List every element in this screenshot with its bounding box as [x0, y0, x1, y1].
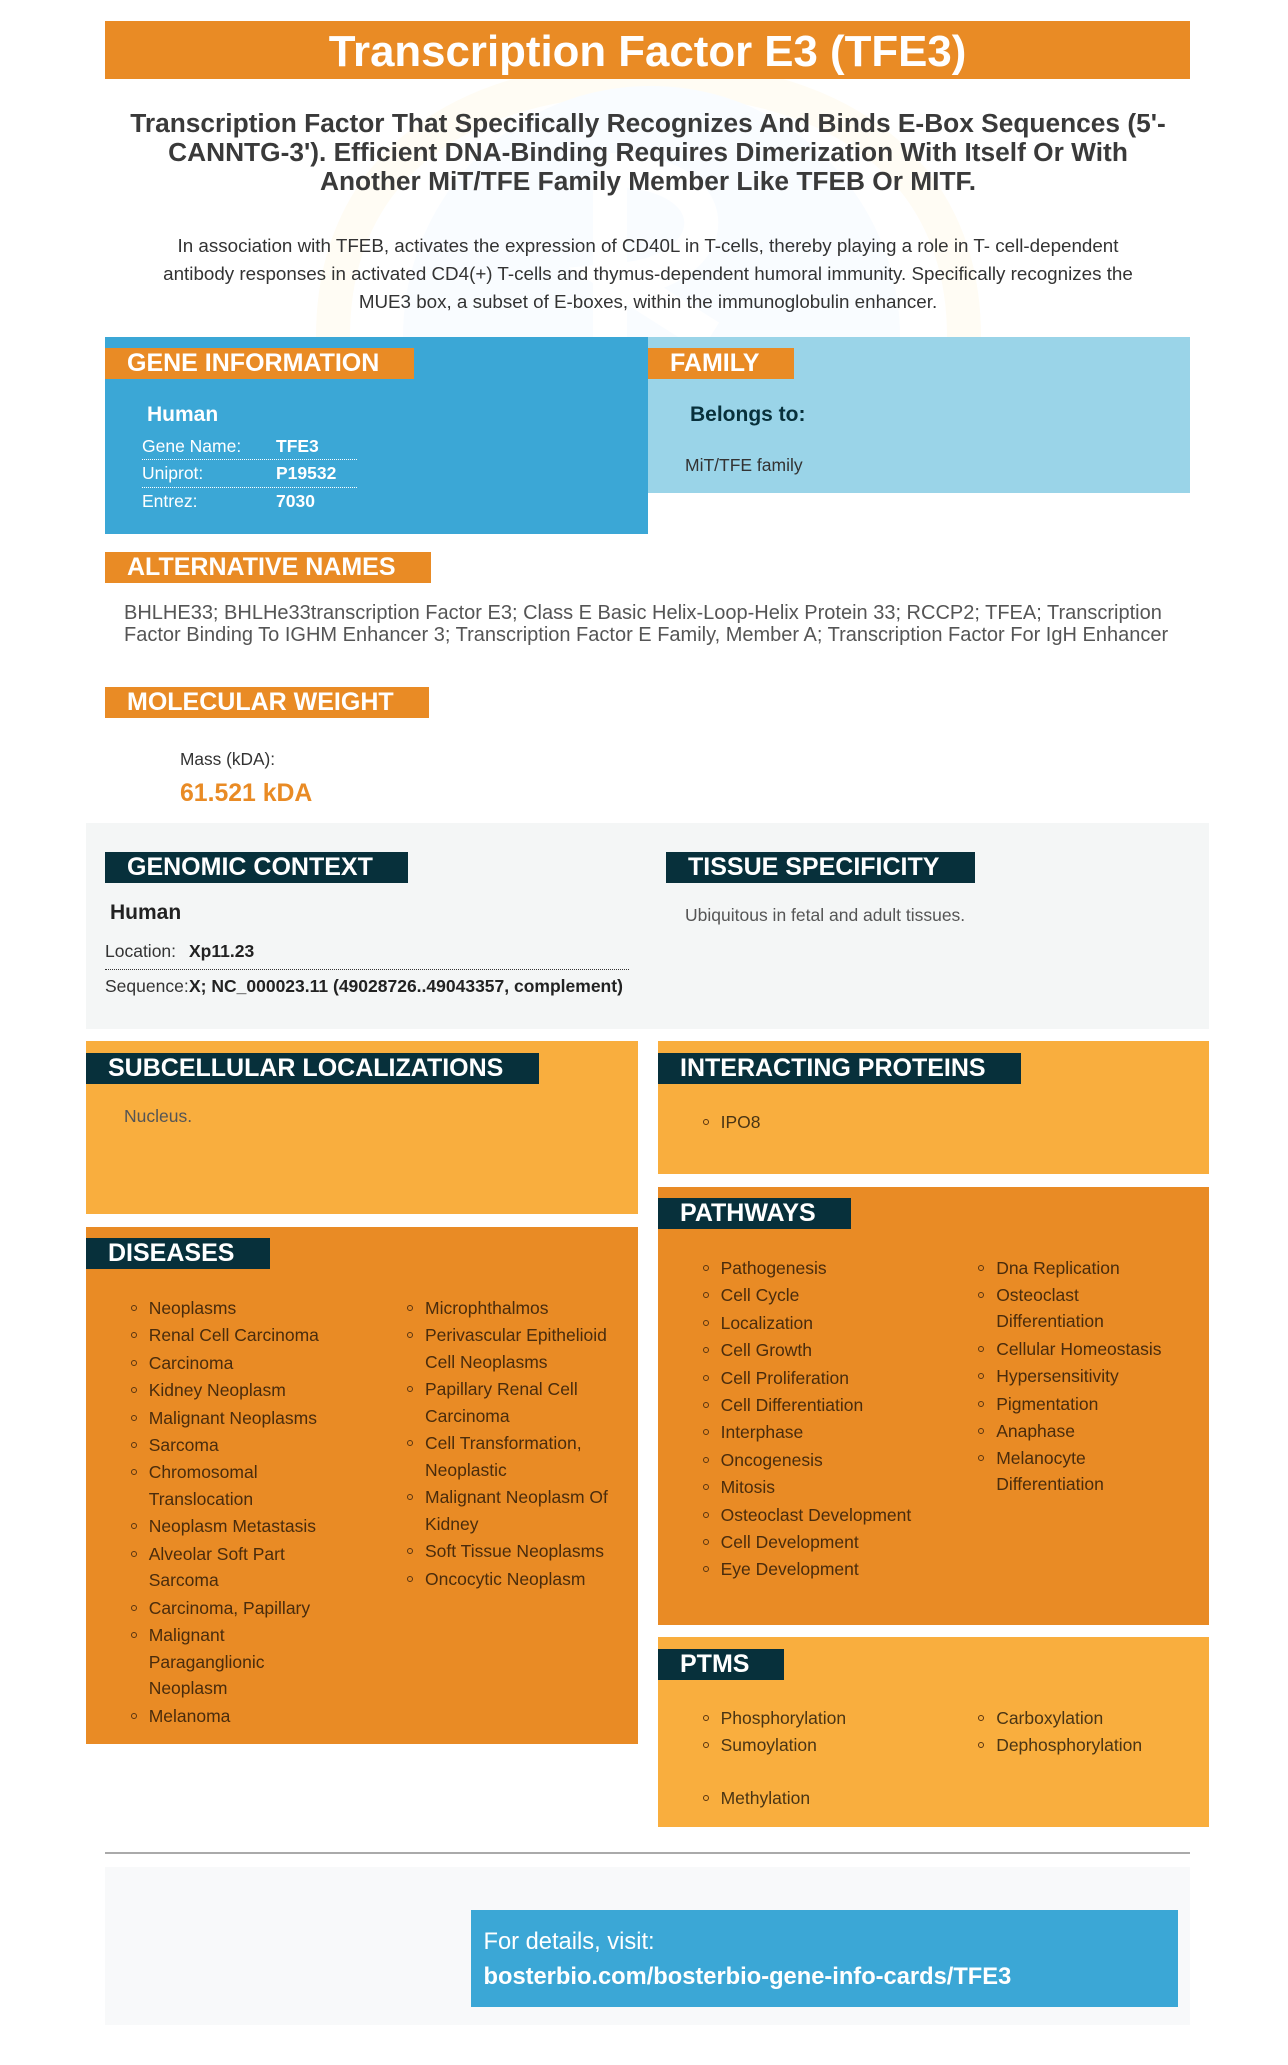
- disease list column 1: Carcinoma: [149, 1353, 233, 1373]
- subtitle: CANNTG-3'). Efficient DNA-Binding Requires Dimerization With Itself Or With: [168, 137, 1128, 167]
- PTM list column 1: Sumoylation: [721, 1735, 817, 1755]
- uniprot row: P19532: [276, 463, 336, 483]
- PTM list column 2: Dephosphorylation: [996, 1735, 1142, 1755]
- pathway list column 1: [703, 1258, 912, 1579]
- localization text: Nucleus.: [124, 1106, 192, 1126]
- family value: MiT/TFE family: [685, 455, 803, 475]
- panel: interacting proteins: [658, 1041, 1209, 1174]
- heading: subcellular localizations: SUBCELLULAR LOCALIZATIONS: [108, 1054, 503, 1082]
- disease list column 1: [131, 1298, 319, 1726]
- pathway list column 1: Cell Growth: [721, 1340, 812, 1360]
- pathway list column 2: Dna Replication: [996, 1258, 1120, 1278]
- panel: PTMs: [658, 1637, 1209, 1827]
- heading: pathways: [658, 1198, 851, 1229]
- entrez row: Entrez:: [142, 491, 197, 511]
- disease list column 2: Soft Tissue Neoplasms: [425, 1541, 604, 1561]
- disease list column 1: Kidney Neoplasm: [149, 1380, 286, 1400]
- panel: subcellular localizations: [86, 1041, 638, 1214]
- disease list column 2: Kidney: [425, 1514, 479, 1534]
- panel: family: [648, 337, 1190, 493]
- alternative names text: Factor Binding To IGHM Enhancer 3; Transcription Factor E Family, Member A; Transcription Factor For IgH Enhancer: [124, 624, 1168, 646]
- pathway list column 2: Hypersensitivity: [996, 1366, 1119, 1386]
- disease list column 2: Carcinoma: [425, 1406, 510, 1426]
- entrez row: [142, 491, 315, 511]
- disease list column 2: Perivascular Epithelioid: [425, 1325, 607, 1345]
- pathway list column 1: Osteoclast Development: [721, 1505, 911, 1525]
- description paragraph: MUE3 box, a subset of E-boxes, within the immunoglobulin enhancer.: [359, 291, 937, 312]
- disease list column 1: Malignant Neoplasms: [149, 1408, 317, 1428]
- disease list column 2: Microphthalmos: [425, 1298, 549, 1318]
- heading: pathways: PATHWAYS: [680, 1199, 816, 1227]
- disease list column 1: Sarcoma: [149, 1570, 219, 1590]
- gene name row: [142, 434, 357, 460]
- pathway list column 2: Differentiation: [996, 1311, 1104, 1331]
- pathway list column 1: Cell Proliferation: [721, 1368, 849, 1388]
- disease list column 2: [407, 1298, 608, 1589]
- disease list column 2: Cell Transformation,: [425, 1433, 582, 1453]
- heading: gene information: GENE INFORMATION: [127, 349, 379, 377]
- description paragraph: In association with TFEB, activates the expression of CD40L in T-cells, thereby playing a role in T- cell-dependent: [178, 234, 1118, 256]
- uniprot row: Uniprot:: [142, 463, 203, 483]
- pathway list column 1: Pathogenesis: [721, 1258, 827, 1278]
- belongs to label: Belongs to:: [690, 403, 806, 426]
- mass label: Mass (kDA):: [180, 749, 275, 769]
- panel: pathways: [658, 1187, 1209, 1625]
- title banner: Transcription Factor E3 (TFE3): [329, 27, 966, 76]
- PTM list column 2: [978, 1708, 1142, 1755]
- sequence row: Sequence:: [105, 976, 189, 996]
- call to action label: For details, visit:: [484, 1928, 655, 1954]
- PTM list column 2: Carboxylation: [996, 1708, 1103, 1728]
- description paragraph: antibody responses in activated CD4(+) T-cells and thymus-dependent humoral immunity. Specifically recognizes the: [163, 263, 1133, 284]
- pathway list column 1: Localization: [721, 1313, 813, 1333]
- subtitle: Another MiT/TFE Family Member Like TFEB Or MITF.: [320, 166, 976, 196]
- species label: Human: [147, 403, 218, 426]
- disease list column 1: Chromosomal: [149, 1462, 258, 1482]
- pathway list column 2: Cellular Homeostasis: [996, 1339, 1162, 1359]
- disease list column 1: Carcinoma, Papillary: [149, 1598, 310, 1618]
- panel: genomic context and tissue specificity: [86, 823, 1209, 1029]
- disease list column 2: Papillary Renal Cell: [425, 1379, 578, 1399]
- disease list column 2: Malignant Neoplasm Of: [425, 1487, 608, 1507]
- pathway list column 1: Cell Differentiation: [721, 1395, 863, 1415]
- pathway list column 1: Eye Development: [721, 1559, 859, 1579]
- disease list column 1: Paraganglionic: [149, 1652, 264, 1672]
- sequence row: [105, 976, 623, 996]
- location row: Location:: [105, 941, 176, 961]
- protein list: IPO8: [721, 1112, 760, 1132]
- pathway list column 2: Melanocyte: [996, 1448, 1086, 1468]
- pathway list column 1: Interphase: [721, 1422, 803, 1442]
- panel: genomic context and tissue specificity: X; NC_000023.11 (49028726..49043357, complement): [189, 976, 623, 996]
- heading: genomic context: GENOMIC CONTEXT: [127, 853, 373, 881]
- disease list column 1: Alveolar Soft Part: [149, 1544, 285, 1564]
- disease list column 2: Cell Neoplasms: [425, 1352, 548, 1372]
- disease list column 1: Neoplasms: [149, 1298, 236, 1318]
- disease list column 2: Neoplastic: [425, 1460, 507, 1480]
- pathway list column 1: Mitosis: [721, 1477, 775, 1497]
- pathway list column 1: Cell Cycle: [721, 1285, 799, 1305]
- PTM list column 1: Phosphorylation: [721, 1708, 846, 1728]
- species label: Human: [110, 901, 181, 924]
- disease list column 1: Melanoma: [149, 1706, 230, 1726]
- heading: family: [648, 348, 794, 379]
- call to action box: [471, 1910, 1178, 2007]
- mass value: 61.521 kDA: [180, 780, 312, 806]
- heading: alternative names: ALTERNATIVE NAMES: [127, 553, 396, 581]
- gene name row: Gene Name:: [142, 436, 241, 456]
- disease list column 1: Neoplasm Metastasis: [149, 1516, 316, 1536]
- panel: diseases: [86, 1227, 638, 1744]
- disease list column 1: Malignant: [149, 1625, 225, 1645]
- PTM list column 1: [703, 1708, 846, 1808]
- location row: [105, 939, 629, 970]
- uniprot row: [142, 461, 357, 488]
- subtitle: [130, 108, 1166, 196]
- heading: molecular weight: MOLECULAR WEIGHT: [127, 688, 394, 716]
- subtitle: Transcription Factor That Specifically Recognizes And Binds E-Box Sequences (5'-: [130, 108, 1166, 138]
- heading: tissue specificity: TISSUE SPECIFICITY: [688, 853, 939, 881]
- details link text: bosterbio.com/bosterbio-gene-info-cards/TFE3: [484, 1964, 1011, 1990]
- disease list column 1: Neoplasm: [149, 1678, 227, 1698]
- PTM list column 1: Methylation: [721, 1788, 810, 1808]
- heading: interacting proteins: INTERACTING PROTEINS: [680, 1054, 986, 1082]
- pathway list column 2: Anaphase: [996, 1421, 1075, 1441]
- pathway list column 1: Oncogenesis: [721, 1450, 823, 1470]
- background logo watermark: [316, 79, 981, 337]
- disease list column 1: Sarcoma: [149, 1435, 219, 1455]
- disease list column 1: Renal Cell Carcinoma: [149, 1325, 319, 1345]
- alternative names text: BHLHE33; BHLHe33transcription Factor E3; Class E Basic Helix-Loop-Helix Protein 33; RCCP2; TFEA; Transcription: [124, 602, 1162, 624]
- heading: diseases: DISEASES: [108, 1239, 234, 1267]
- alternative names text: [124, 602, 1168, 646]
- pathway list column 2: Differentiation: [996, 1474, 1104, 1494]
- pathway list column 2: [978, 1258, 1162, 1494]
- entrez row: 7030: [276, 491, 315, 511]
- location row: Xp11.23: [189, 941, 254, 961]
- footer panel: [105, 1867, 1190, 2025]
- pathway list column 2: Osteoclast: [996, 1285, 1079, 1305]
- panel: gene information: [105, 337, 648, 534]
- heading: diseases: [86, 1238, 270, 1269]
- description paragraph: [163, 234, 1133, 312]
- tissue specificity text: Ubiquitous in fetal and adult tissues.: [685, 905, 965, 925]
- title banner: [105, 21, 1190, 79]
- disease list column 1: Translocation: [149, 1489, 253, 1509]
- gene name row: TFE3: [276, 436, 319, 456]
- disease list column 2: Oncocytic Neoplasm: [425, 1569, 585, 1589]
- heading: PTMs: PTMS: [680, 1650, 749, 1678]
- heading: family: FAMILY: [670, 349, 759, 377]
- pathway list column 1: Cell Development: [721, 1532, 859, 1552]
- heading: PTMs: [658, 1649, 784, 1680]
- pathway list column 2: Pigmentation: [996, 1394, 1098, 1414]
